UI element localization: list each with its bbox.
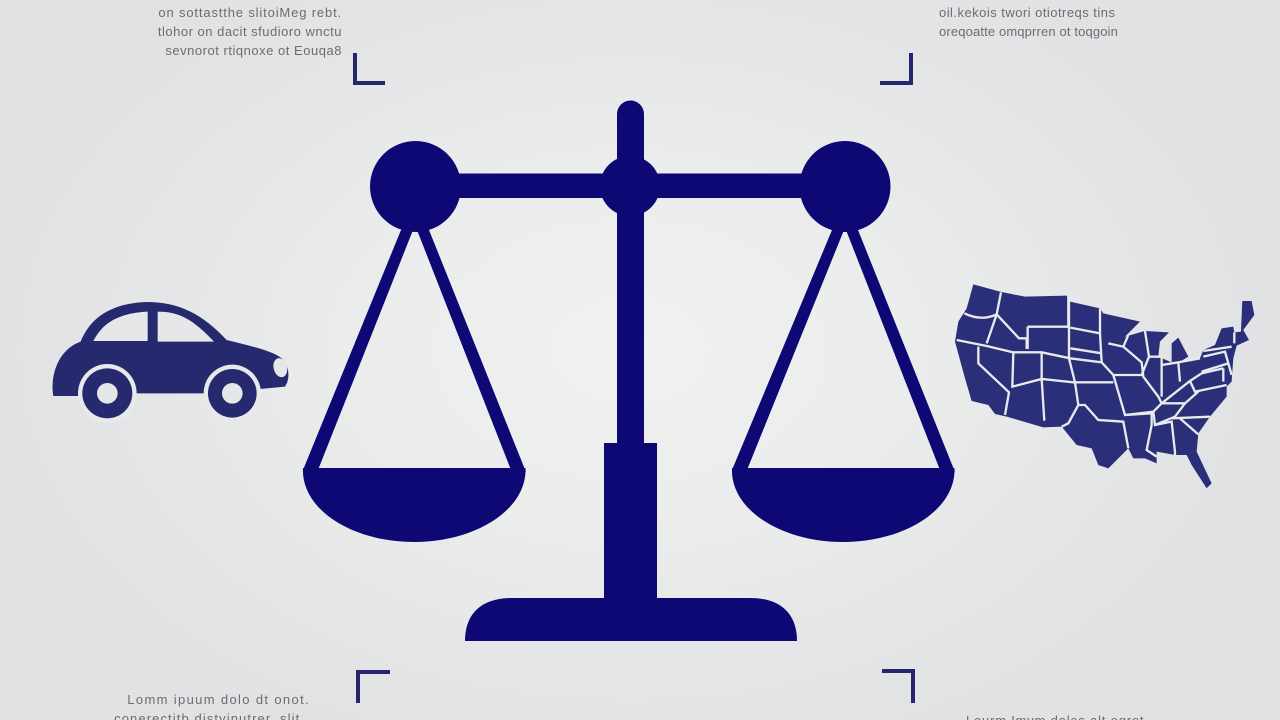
text block: bottom left	[114, 692, 310, 720]
icon: car	[53, 302, 289, 423]
icon: United States map	[955, 284, 1254, 488]
left pan strings	[303, 230, 526, 472]
text block: top left: tlohor on dacit sfudioro wnctu	[158, 24, 342, 39]
right beam end	[800, 141, 890, 232]
icon: scales of justice	[303, 100, 955, 641]
scale column	[604, 443, 657, 601]
left beam end	[370, 141, 461, 232]
beam pivot	[600, 156, 660, 216]
text block: top left: on sottastthe slitoiMeg rebt.	[158, 5, 342, 20]
text block: top left: sevnorot rtiqnoxe ot Eouqa8	[165, 43, 342, 58]
text block: bottom left: Lomm ipuum dolo dt onot.	[127, 692, 310, 707]
scale base	[465, 598, 797, 641]
scale post	[617, 100, 644, 445]
right pan	[732, 468, 955, 542]
corner bracket: bottom right	[882, 671, 913, 703]
scale beam	[415, 174, 845, 198]
text block: top right: oil.kekois twori otiotreqs tins	[939, 5, 1115, 20]
corner bracket: top left	[355, 53, 385, 83]
text block: top right	[939, 5, 1118, 39]
right pan strings	[732, 230, 955, 472]
text block: top left	[158, 5, 342, 58]
left pan	[303, 468, 526, 542]
corner bracket: bottom left	[358, 672, 390, 703]
corner bracket: top right	[880, 53, 911, 83]
text block: top right: oreqoatte omqprren ot toqgoin	[939, 24, 1118, 39]
